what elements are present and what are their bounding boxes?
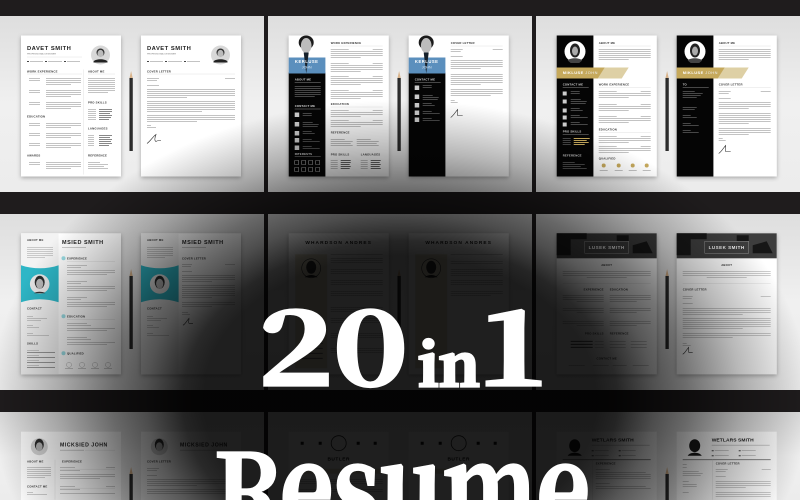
cover letter page: Msied Smith: CONTACT <box>147 306 162 310</box>
resume page: Msied Smith: SKILLS <box>27 341 38 345</box>
resume page: Butler <box>289 432 389 500</box>
cover letter page: Micksied John <box>141 432 241 500</box>
title word: in: in <box>418 319 480 403</box>
resume page: Davet Smith: PRO SKILLS <box>88 100 107 104</box>
cover letter page: Butler <box>409 432 509 500</box>
resume page: Lusek Smith: REFERENCE <box>610 331 629 335</box>
cover letter page: Wetlars Smith: COVER LETTER <box>716 462 740 466</box>
panel: Mikluse John resume <box>536 16 800 192</box>
cover letter page: Kerluse John: COVER LETTER <box>451 41 475 45</box>
resume page: Kerluse John <box>289 36 389 176</box>
resume page: Whardson Andres <box>289 233 389 374</box>
cover letter page: Mikluse John: ABOUT ME <box>719 41 735 45</box>
resume page: Wetlars Smith: EXPERIENCE <box>596 462 616 466</box>
panel: Whardson Andres resume <box>268 214 532 390</box>
cover letter page: Micksied John: COVER LETTER <box>147 460 171 464</box>
resume page: Mikluse John: REFERENCE <box>563 154 582 158</box>
title: 20 in 1 Resume <box>216 308 588 500</box>
resume page: Kerluse John: LANGUAGES <box>361 152 380 156</box>
resume page: Lusek Smith: EXPERIENCE <box>584 287 604 291</box>
resume page: Mikluse John: QUALIFIED <box>599 156 616 160</box>
cover letter page: Davet Smith: PROFESSIONAL DESIGNER <box>147 52 176 55</box>
resume page: Wetlars Smith: WETLARS SMITH <box>592 438 634 444</box>
cover letter page: Mikluse John: COVER LETTER <box>719 82 743 86</box>
panel: Micksied John resume <box>0 412 264 500</box>
resume page: Lusek Smith: LUSEK SMITH <box>589 245 625 250</box>
panel: Lusek Smith resume <box>536 214 800 390</box>
resume page: Micksied John <box>21 432 121 500</box>
cover letter page: Msied Smith: MSIED SMITH <box>182 240 224 246</box>
resume page: Kerluse John: REFERENCE <box>331 130 350 134</box>
panel: Butler resume <box>268 412 532 500</box>
cover letter page: Msied Smith <box>141 233 241 374</box>
resume page: Davet Smith <box>21 36 121 176</box>
resume page: Kerluse John: ABOUT ME <box>295 78 311 82</box>
resume page: Davet Smith: EDUCATION <box>27 114 45 118</box>
resume page: Mikluse John: MIKLUSE JOHN <box>563 70 598 75</box>
cover letter page: Lusek Smith: LUSEK SMITH <box>709 245 745 250</box>
resume page: Mikluse John: CONTACT ME <box>563 82 583 86</box>
cover letter page: Davet Smith: COVER LETTER <box>147 70 171 74</box>
portrait <box>299 36 314 74</box>
pencil <box>398 71 401 151</box>
title number: 1: 1 <box>477 267 549 415</box>
resume page: Whardson Andres: WHARDSON ANDRES <box>305 240 372 246</box>
cover letter page: Davet Smith: DAVET SMITH <box>147 46 191 52</box>
resume page: Kerluse John: KERLUSE <box>295 59 318 64</box>
panel: Davet Smith resume <box>0 16 264 192</box>
resume page: Mikluse John: EDUCATION <box>599 128 617 132</box>
resume page: Msied Smith: ABOUT ME <box>27 238 44 242</box>
cover letter page: Msied Smith: COVER LETTER <box>182 256 206 260</box>
resume page: Msied Smith: EXPERIENCE <box>67 256 87 260</box>
resume page: Micksied John: ABOUT ME <box>27 460 44 464</box>
resume page: Kerluse John: EDUCATION <box>331 102 349 106</box>
resume page: Kerluse John: JOHN <box>302 65 312 69</box>
resume page: Mikluse John: PRO SKILLS <box>563 130 581 134</box>
resume page: Msied Smith: MSIED SMITH <box>62 240 104 246</box>
cover letter page: Mikluse John <box>677 36 777 176</box>
resume page: Kerluse John: CONTACT ME <box>295 104 315 108</box>
pencil <box>666 71 669 151</box>
cover letter page: Micksied John: MICKSIED JOHN <box>180 443 228 449</box>
resume page: Mikluse John <box>557 36 657 176</box>
resume page: Kerluse John: PRO SKILLS <box>331 152 349 156</box>
resume page: Lusek Smith <box>557 233 657 374</box>
resume page: Davet Smith: ABOUT ME <box>88 70 105 74</box>
resume page: Wetlars Smith <box>557 432 657 500</box>
cover letter page: Mikluse John: TO <box>683 82 688 86</box>
resume page: Micksied John: CONTACT ME <box>27 485 47 489</box>
resume page: Lusek Smith: CONTACT ME <box>596 356 617 360</box>
pencil <box>130 269 133 349</box>
pencil <box>398 269 401 349</box>
resume page: Davet Smith: LANGUAGES <box>88 126 108 130</box>
resume page: Msied Smith <box>21 233 121 374</box>
pencil <box>666 269 669 349</box>
resume page: Davet Smith: WORK EXPERIENCE <box>27 70 58 74</box>
resume page: Micksied John: EXPERIENCE <box>62 460 82 464</box>
pencil <box>130 467 133 500</box>
resume page: Msied Smith: CONTACT <box>27 306 42 310</box>
resume page: Davet Smith: PROFESSIONAL DESIGNER <box>27 52 56 55</box>
resume page: Msied Smith: EDUCATION <box>67 314 85 318</box>
resume page: Mikluse John: WORK EXPERIENCE <box>599 82 629 86</box>
cover letter page: Lusek Smith: COVER LETTER <box>683 287 707 291</box>
cover letter page: Kerluse John: JOHN <box>422 65 432 69</box>
cover letter page: Wetlars Smith: WETLARS SMITH <box>712 438 754 444</box>
resume page: Davet Smith: AWARDS <box>27 154 40 158</box>
pencil <box>398 467 401 500</box>
title number: 20: 20 <box>258 267 408 415</box>
pencil <box>130 71 133 151</box>
resume page: Micksied John: MICKSIED JOHN <box>60 443 108 449</box>
resume page: Msied Smith: QUALIFIED <box>67 351 84 355</box>
cover letter page: Whardson Andres <box>409 233 509 374</box>
resume page: Davet Smith: DAVET SMITH <box>27 46 71 52</box>
panel: Wetlars Smith resume <box>536 412 800 500</box>
panel: Msied Smith resume <box>0 214 264 390</box>
cover letter page: Whardson Andres: WHARDSON ANDRES <box>425 240 492 246</box>
resume page: Lusek Smith: ABOUT <box>601 263 612 267</box>
cover letter page: Kerluse John: KERLUSE <box>415 59 438 64</box>
portrait <box>419 36 434 74</box>
cover letter page: Lusek Smith <box>677 233 777 374</box>
pencil <box>666 467 669 500</box>
cover letter page: Wetlars Smith <box>677 432 777 500</box>
cover letter page: Mikluse John: MIKLUSE JOHN <box>683 70 718 75</box>
resume page: Mikluse John: ABOUT ME <box>599 41 615 45</box>
resume page: Kerluse John: INTERESTS <box>295 152 312 156</box>
cover letter page: Lusek Smith: ABOUT <box>721 263 732 267</box>
cover letter page: Kerluse John <box>409 36 509 176</box>
resume page: Lusek Smith: EDUCATION <box>610 287 628 291</box>
cover letter page: Kerluse John: CONTACT ME <box>415 78 435 82</box>
resume page: Lusek Smith: PRO SKILLS <box>585 331 604 335</box>
cover letter page: Msied Smith: ABOUT ME <box>147 238 164 242</box>
resume page: Butler: BUTLER <box>327 457 350 463</box>
resume page: Davet Smith: REFERENCE <box>88 154 107 158</box>
cover letter page: Butler: BUTLER <box>447 457 470 463</box>
cover letter page: Davet Smith <box>141 36 241 176</box>
resume page: Kerluse John: WORK EXPERIENCE <box>331 41 361 45</box>
panel: Kerluse John resume <box>268 16 532 192</box>
